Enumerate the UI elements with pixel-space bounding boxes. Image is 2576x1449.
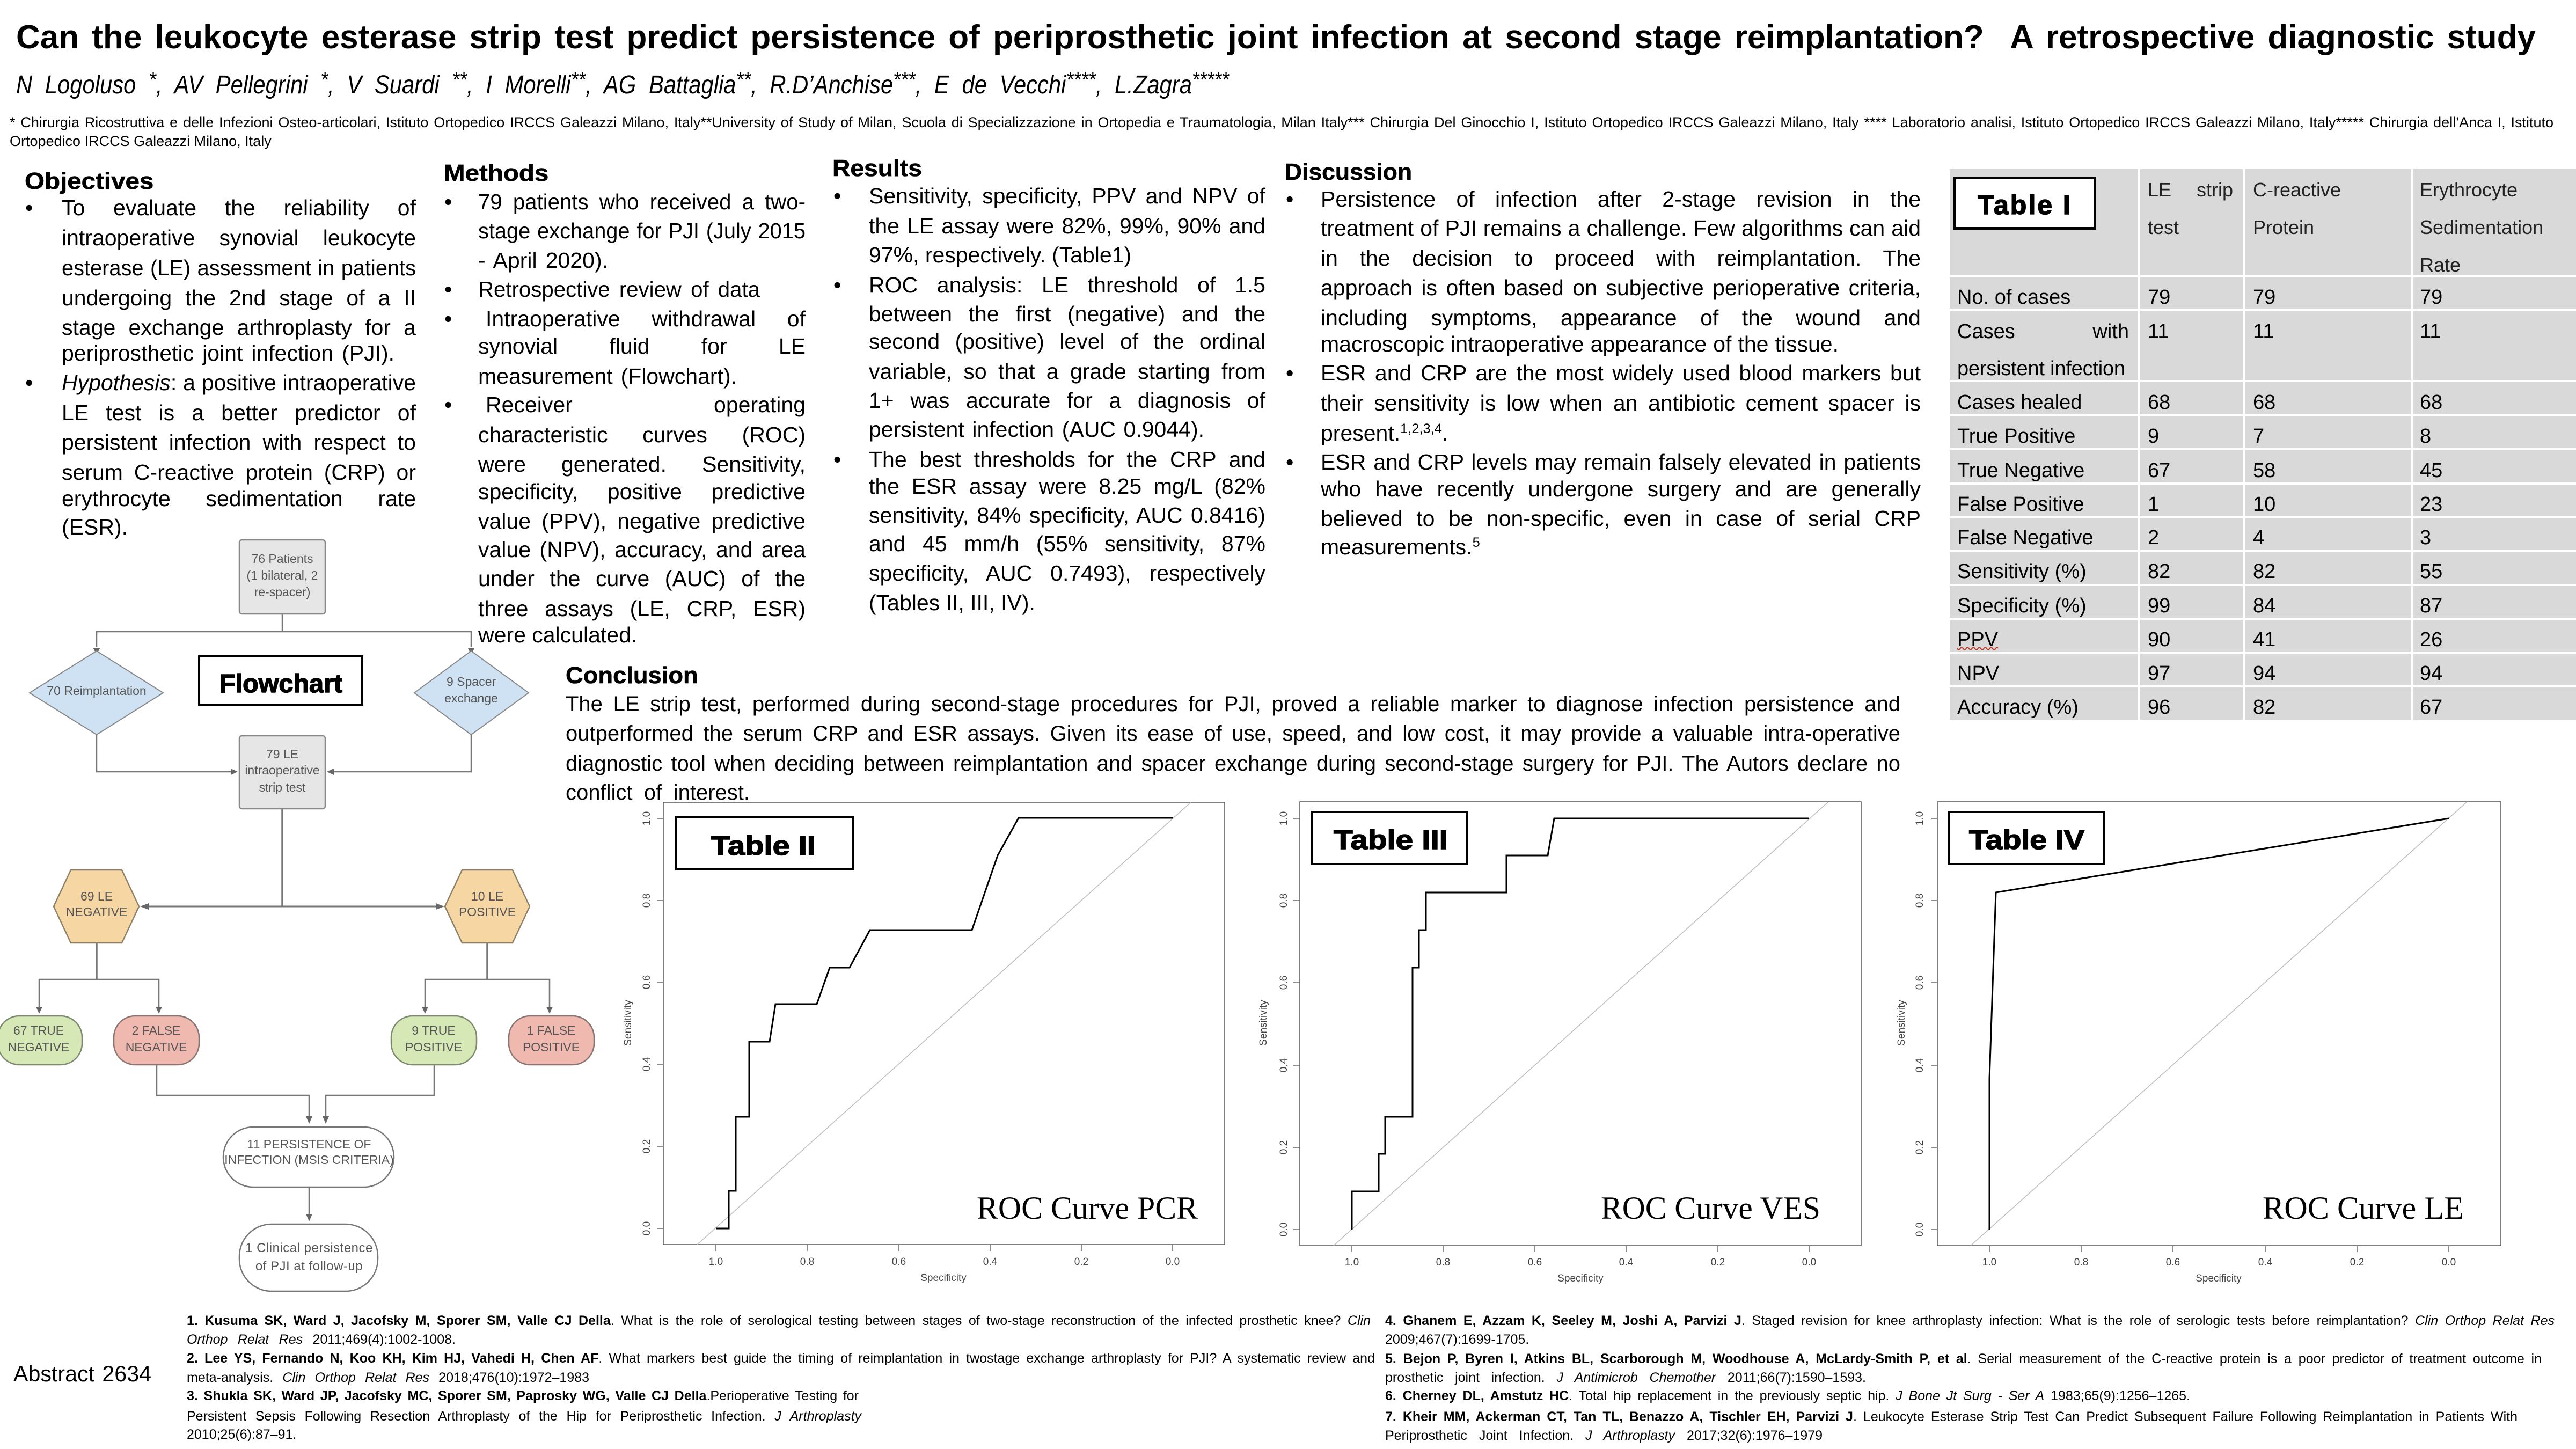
row: sensitivity: 55 bbox=[2420, 560, 2442, 583]
y axis labels: Sensitivity bbox=[623, 1000, 634, 1046]
conclusion text: outperformed the serum CRP and ESR assays. Given its ease of use, speed, and low cost, it may provide a valuable intra-operative bbox=[566, 722, 1900, 745]
row: cases healed: 68 bbox=[2253, 391, 2275, 414]
y axis labels: 0.4 bbox=[641, 1057, 653, 1071]
conclusion text: The LE strip test, performed during second-stage procedures for PJI, proved a reliable marker to diagnose infection persistence and bbox=[566, 692, 1900, 716]
y axis labels: 0.2 bbox=[1278, 1140, 1290, 1154]
y axis labels: 1.0 bbox=[1914, 811, 1926, 825]
results text: (Tables II, III, IV). bbox=[869, 590, 1035, 615]
row: cases with persistent infection: persistent infection bbox=[1957, 357, 2125, 380]
objectives text: LE test is a better predictor of bbox=[62, 400, 416, 425]
discussion text: treatment of PJI remains a challenge. Few algorithms can aid bbox=[1321, 216, 1921, 240]
row: cases with persistent infection: Cases with bbox=[1957, 320, 2129, 343]
x axis labels: 1.0 bbox=[1345, 1257, 1359, 1268]
methods text: Receiver operating bbox=[486, 392, 806, 417]
references right column: 2009;467(7):1699-1705. bbox=[1385, 1332, 1529, 1347]
node: 76 patients: re-spacer) bbox=[254, 585, 310, 599]
x axis labels: Specificity bbox=[1557, 1273, 1604, 1284]
panel: discussion bbox=[1285, 159, 1921, 559]
x axis labels: 0.2 bbox=[1711, 1257, 1725, 1268]
discussion text: believed to be non-specific, even in case of serial CRP bbox=[1321, 506, 1921, 531]
methods text: • bbox=[444, 392, 452, 417]
results text: • bbox=[833, 273, 841, 297]
row: PPV: PPV bbox=[1957, 628, 1998, 651]
row: accuracy: 67 bbox=[2420, 696, 2442, 719]
discussion text: • bbox=[1286, 361, 1293, 385]
node: 1 clinical persistence bbox=[239, 1224, 378, 1291]
node: 70 reimplantation: 70 Reimplantation bbox=[47, 684, 147, 698]
references left column: 3. Shukla SK, Ward JP, Jacofsky MC, Sporer SM, Paprosky WG, Valle CJ Della.Perioperative Testing for bbox=[187, 1388, 859, 1403]
results text bbox=[833, 184, 1265, 615]
discussion text: their sensitivity is low when an antibiotic cement spacer is bbox=[1321, 391, 1921, 415]
objectives text: undergoing the 2nd stage of a II bbox=[62, 286, 416, 310]
curve label: ROC Curve LE bbox=[2263, 1190, 2464, 1226]
row: specificity: 87 bbox=[2420, 595, 2442, 617]
row: true positive: 8 bbox=[2420, 425, 2431, 448]
x axis labels: 0.0 bbox=[1166, 1256, 1180, 1268]
x axis labels: 0.0 bbox=[2442, 1257, 2456, 1268]
references right column bbox=[1385, 1313, 2555, 1443]
table III label box bbox=[1312, 812, 1467, 864]
node: 2 false negative: 2 FALSE bbox=[132, 1023, 180, 1037]
node: 11 persistence of infection bbox=[223, 1127, 394, 1187]
objectives text: To evaluate the reliability of bbox=[62, 195, 416, 220]
node: 11 persistence of infection: INFECTION (MSIS CRITERIA) bbox=[224, 1153, 394, 1167]
node: 70 reimplantation bbox=[30, 651, 163, 735]
row: accuracy: Accuracy (%) bbox=[1957, 696, 2079, 719]
table I label box: Table I bbox=[1978, 190, 2072, 220]
objectives text: Hypothesis: a positive intraoperative bbox=[62, 370, 416, 395]
references left column: 2. Lee YS, Fernando N, Koo KH, Kim HJ, Vahedi H, Chen AF. What markers best guide the timing of reimplantation in twostage exchange arthroplasty for PJI? A systematic review and bbox=[187, 1351, 1375, 1366]
node: 10 LE positive bbox=[445, 870, 530, 943]
node: 79 LE strip test: intraoperative bbox=[245, 763, 320, 777]
row: cases with persistent infection: 11 bbox=[2253, 320, 2274, 343]
row: PPV: 26 bbox=[2420, 628, 2442, 651]
methods text: Intraoperative withdrawal of bbox=[486, 306, 806, 331]
chart: ROC curve PCR bbox=[623, 802, 1225, 1284]
results text: ROC analysis: LE threshold of 1.5 bbox=[869, 273, 1265, 297]
y axis labels: 0.4 bbox=[1914, 1058, 1926, 1072]
discussion text: measurements.5 bbox=[1321, 535, 1480, 559]
y axis labels: Sensitivity bbox=[1258, 1000, 1269, 1046]
x axis labels bbox=[709, 1256, 1180, 1284]
row: sensitivity bbox=[1950, 552, 2576, 584]
y axis labels bbox=[623, 811, 653, 1235]
y axis labels: 0.0 bbox=[1914, 1223, 1926, 1236]
row: true positive: 9 bbox=[2148, 425, 2159, 448]
results text: • bbox=[833, 447, 841, 472]
methods text: characteristic curves (ROC) bbox=[478, 422, 806, 447]
node: 9 spacer exchange: 9 Spacer bbox=[447, 675, 496, 689]
row: no. of cases: 79 bbox=[2420, 286, 2442, 309]
heading: results: Results bbox=[832, 155, 922, 181]
ROC curve line bbox=[1352, 818, 1809, 1230]
results text: between the first (negative) and the bbox=[869, 302, 1265, 326]
row: true negative: 58 bbox=[2253, 459, 2275, 482]
node: 1 false positive: POSITIVE bbox=[523, 1040, 580, 1054]
x axis labels: 0.8 bbox=[2074, 1257, 2088, 1268]
node: 1 clinical persistence: 1 Clinical persistence bbox=[245, 1241, 373, 1255]
references left column: meta-analysis. Clin Orthop Relat Res 2018;476(10):1972–1983 bbox=[187, 1370, 589, 1385]
results text: variable, so that a grade starting from bbox=[869, 359, 1265, 384]
node: 67 true negative: 67 TRUE bbox=[13, 1023, 64, 1037]
row: PPV: 41 bbox=[2253, 628, 2275, 651]
methods text: specificity, positive predictive bbox=[478, 479, 806, 504]
y axis labels: 0.8 bbox=[1278, 894, 1290, 908]
row: true positive: True Positive bbox=[1957, 425, 2075, 448]
discussion text: who have recently undergone surgery and are generally bbox=[1321, 477, 1921, 501]
node: 67 true negative bbox=[0, 1016, 82, 1065]
row: false positive: 23 bbox=[2420, 493, 2442, 516]
discussion text: including symptoms, appearance of the wound and bbox=[1321, 305, 1921, 330]
references right column: 6. Cherney DL, Amstutz HC. Total hip replacement in the previously septic hip. J Bone Jt Surg - Ser A 1983;65(9):1256–1265. bbox=[1385, 1388, 2190, 1403]
affiliations bbox=[10, 114, 2553, 149]
row: true negative: True Negative bbox=[1957, 459, 2084, 482]
row: false negative: 4 bbox=[2253, 526, 2264, 549]
y axis labels: 0.6 bbox=[1914, 976, 1926, 990]
x axis labels: 0.2 bbox=[1074, 1256, 1088, 1268]
row: false positive: False Positive bbox=[1957, 493, 2084, 516]
affiliations: * Chirurgia Ricostruttiva e delle Infezioni Osteo-articolari, Istituto Ortopedico IRCCS Galeazzi Milano, Italy**University of Study of Milan, Scuola di Specializzazione in Ortopedia e Traumatologia, Milan Italy*** Chirurgia Del Ginocchio I, Istituto Ortopedico IRCCS Galeazzi Milano, Italy **** Laboratorio analisi, Istituto Ortopedico IRCCS Galeazzi Milano, Italy***** Chirurgia dell’Anca I, Istituto bbox=[10, 114, 2553, 130]
row: cases with persistent infection: 11 bbox=[2420, 320, 2441, 343]
row: cases healed bbox=[1950, 382, 2576, 414]
node: 1 clinical persistence: of PJI at follow-up bbox=[255, 1259, 363, 1274]
x axis labels: 1.0 bbox=[1982, 1257, 1996, 1268]
ROC curve line bbox=[716, 818, 1173, 1228]
node: 11 persistence of infection: 11 PERSISTENCE OF bbox=[247, 1137, 371, 1151]
row: cases healed: Cases healed bbox=[1957, 391, 2082, 414]
node: 10 LE positive: 10 LE bbox=[471, 889, 503, 903]
panel: objectives bbox=[25, 168, 416, 539]
row: specificity: 84 bbox=[2253, 595, 2275, 617]
references left column: Orthop Relat Res 2011;469(4):1002-1008. bbox=[187, 1332, 456, 1347]
objectives text: serum C-reactive protein (CRP) or bbox=[62, 460, 416, 485]
node: 76 patients: 76 Patients bbox=[251, 552, 313, 566]
row: true positive: 7 bbox=[2253, 425, 2264, 448]
node: 1 false positive: 1 FALSE bbox=[527, 1023, 575, 1037]
objectives text: stage exchange arthroplasty for a bbox=[62, 315, 416, 340]
table header row: Rate bbox=[2420, 254, 2461, 276]
row: no. of cases bbox=[1950, 277, 2576, 309]
methods text: 79 patients who received a two- bbox=[478, 189, 806, 214]
conclusion text: conflict of interest. bbox=[566, 781, 750, 804]
objectives text: persistent infection with respect to bbox=[62, 430, 416, 455]
table header row bbox=[1950, 169, 2576, 275]
row: NPV: 97 bbox=[2148, 662, 2170, 685]
x axis labels bbox=[1345, 1257, 1816, 1284]
curve label: ROC Curve VES bbox=[1601, 1190, 1820, 1226]
methods text: measurement (Flowchart). bbox=[478, 364, 737, 389]
row: cases healed: 68 bbox=[2420, 391, 2442, 414]
node: 9 spacer exchange bbox=[414, 651, 529, 735]
panel: methods bbox=[444, 160, 806, 647]
row: NPV: 94 bbox=[2420, 662, 2442, 685]
node: 9 true positive: POSITIVE bbox=[405, 1040, 462, 1054]
x axis labels: 0.4 bbox=[2258, 1257, 2273, 1268]
row: accuracy: 96 bbox=[2148, 696, 2170, 719]
methods text: three assays (LE, CRP, ESR) bbox=[478, 596, 806, 621]
table header row: Protein bbox=[2253, 216, 2314, 238]
objectives text: • bbox=[25, 195, 33, 220]
node: 9 true positive bbox=[391, 1016, 477, 1065]
x axis labels: 0.6 bbox=[1528, 1257, 1542, 1268]
methods text: value (PPV), negative predictive bbox=[478, 509, 806, 533]
panel: conclusion bbox=[566, 662, 1900, 804]
results text: 1+ was accurate for a diagnosis of bbox=[869, 388, 1265, 413]
table IV label box: Table IV bbox=[1969, 825, 2085, 855]
node: 2 false negative bbox=[114, 1016, 199, 1065]
references left column: 1. Kusuma SK, Ward J, Jacofsky M, Sporer SM, Valle CJ Della. What is the role of serological testing between stages of two-stage reconstruction of the infected prosthetic knee? Clin bbox=[187, 1313, 1371, 1328]
methods text: value (NPV), accuracy, and area bbox=[478, 537, 806, 562]
table header row: Erythrocyte bbox=[2420, 179, 2518, 201]
methods text: were generated. Sensitivity, bbox=[478, 452, 806, 477]
references right column: prosthetic joint infection. J Antimicrob Chemother 2011;66(7):1590–1593. bbox=[1385, 1370, 1866, 1385]
node: 67 true negative: NEGATIVE bbox=[8, 1040, 69, 1054]
discussion text bbox=[1286, 187, 1921, 559]
discussion text: ESR and CRP levels may remain falsely elevated in patients bbox=[1321, 450, 1921, 474]
objectives text: periprosthetic joint infection (PJI). bbox=[62, 341, 394, 365]
y axis labels: 0.8 bbox=[641, 894, 653, 908]
results text: the ESR assay were 8.25 mg/L (82% bbox=[869, 474, 1265, 499]
y axis labels: 0.8 bbox=[1914, 894, 1926, 908]
flowchart label box: Flowchart bbox=[219, 670, 342, 698]
node: 1 false positive bbox=[509, 1016, 594, 1065]
x axis labels: Specificity bbox=[920, 1272, 967, 1284]
y axis labels: 1.0 bbox=[641, 811, 653, 825]
row: no. of cases: No. of cases bbox=[1957, 286, 2070, 309]
row: false negative bbox=[1950, 518, 2576, 550]
results text: sensitivity, 84% specificity, AUC 0.8416) bbox=[869, 503, 1265, 528]
chart: ROC curve VES bbox=[1258, 802, 1861, 1284]
y axis labels: Sensitivity bbox=[1896, 1000, 1907, 1046]
row: no. of cases: 79 bbox=[2253, 286, 2275, 309]
node: 76 patients: (1 bilateral, 2 bbox=[247, 568, 318, 582]
row: true positive bbox=[1950, 416, 2576, 448]
table IV label box bbox=[1949, 812, 2104, 864]
row: specificity: 99 bbox=[2148, 595, 2170, 617]
heading: methods: Methods bbox=[444, 160, 548, 186]
node: 69 LE negative bbox=[54, 870, 139, 943]
node: 79 LE strip test: strip test bbox=[259, 780, 306, 794]
row: false negative: 3 bbox=[2420, 526, 2431, 549]
methods text: stage exchange for PJI (July 2015 bbox=[478, 218, 806, 243]
row: false positive bbox=[1950, 485, 2576, 516]
row: false negative: False Negative bbox=[1957, 526, 2093, 549]
node: 9 true positive: 9 TRUE bbox=[412, 1023, 456, 1037]
row: PPV bbox=[1950, 620, 2576, 652]
heading: discussion: Discussion bbox=[1285, 159, 1412, 185]
node: 69 LE negative: NEGATIVE bbox=[66, 905, 127, 919]
node: 76 patients bbox=[239, 540, 325, 614]
y axis labels: 0.6 bbox=[1278, 976, 1290, 990]
references right column: Periprosthetic Joint Infection. J Arthroplasty 2017;32(6):1976–1979 bbox=[1385, 1428, 1823, 1443]
row: true negative: 45 bbox=[2420, 459, 2442, 482]
y axis labels: 0.0 bbox=[1278, 1223, 1290, 1236]
references left column: Persistent Sepsis Following Resection Arthroplasty of the Hip for Periprosthetic Infection. J Arthroplasty bbox=[187, 1409, 861, 1424]
y axis labels: 0.0 bbox=[641, 1221, 653, 1235]
discussion text: approach is often based on subjective perioperative criteria, bbox=[1321, 275, 1921, 300]
references left column: 2010;25(6):87–91. bbox=[187, 1427, 296, 1442]
row: PPV: 90 bbox=[2148, 628, 2170, 651]
methods text: synovial fluid for LE bbox=[478, 334, 806, 358]
chart: ROC curve LE bbox=[1896, 802, 2501, 1284]
title: Can the leukocyte esterase strip test predict persistence of periprosthetic joint infection at second stage reimplantation? A retrospective diagnostic study bbox=[16, 19, 2536, 56]
row: no. of cases: 79 bbox=[2148, 286, 2170, 309]
discussion text: ESR and CRP are the most widely used blood markers but bbox=[1321, 361, 1921, 385]
discussion text: macroscopic intraoperative appearance of the tissue. bbox=[1321, 332, 1839, 356]
row: sensitivity: 82 bbox=[2148, 560, 2170, 583]
y axis labels bbox=[1896, 811, 1926, 1236]
node: 69 LE negative: 69 LE bbox=[80, 889, 113, 903]
row: false negative: 2 bbox=[2148, 526, 2159, 549]
node: 79 LE strip test bbox=[239, 736, 325, 809]
panel: results bbox=[832, 155, 1265, 615]
x axis labels: 0.8 bbox=[1436, 1257, 1450, 1268]
results text: second (positive) level of the ordinal bbox=[869, 329, 1265, 354]
discussion text: in the decision to proceed with reimplantation. The bbox=[1321, 246, 1921, 270]
node: 2 false negative: NEGATIVE bbox=[126, 1040, 187, 1054]
methods text bbox=[444, 189, 806, 647]
x axis labels: 0.6 bbox=[892, 1256, 906, 1268]
row: false positive: 10 bbox=[2253, 493, 2275, 516]
discussion text: Persistence of infection after 2-stage revision in the bbox=[1321, 187, 1921, 211]
y axis labels: 1.0 bbox=[1278, 811, 1290, 825]
row: accuracy: 82 bbox=[2253, 696, 2275, 719]
x axis labels: 0.2 bbox=[2350, 1257, 2364, 1268]
conclusion text: diagnostic tool when deciding between reimplantation and spacer exchange during second-stage surgery for PJI. The Autors declare no bbox=[566, 752, 1900, 775]
references right column: 7. Kheir MM, Ackerman CT, Tan TL, Benazzo A, Tischler EH, Parvizi J. Leukocyte Esterase Strip Test Can Predict Subsequent Failure Following Reimplantation in Patients With bbox=[1385, 1409, 2518, 1424]
ROC curve line bbox=[1989, 818, 2449, 1230]
methods text: - April 2020). bbox=[478, 248, 608, 273]
objectives text: (ESR). bbox=[62, 515, 128, 539]
row: accuracy bbox=[1950, 687, 2576, 720]
discussion text: • bbox=[1286, 187, 1293, 211]
row: cases healed: 68 bbox=[2148, 391, 2170, 414]
node: 79 LE strip test: 79 LE bbox=[266, 747, 298, 761]
row: true negative bbox=[1950, 450, 2576, 482]
y axis labels: 0.4 bbox=[1278, 1058, 1290, 1072]
results text: 97%, respectively. (Table1) bbox=[869, 243, 1131, 267]
row: NPV: 94 bbox=[2253, 662, 2275, 685]
flowchart label box bbox=[199, 656, 362, 705]
row: sensitivity: 82 bbox=[2253, 560, 2275, 583]
discussion text: present.1,2,3,4. bbox=[1321, 421, 1448, 445]
row: NPV bbox=[1950, 654, 2576, 685]
row: true negative: 67 bbox=[2148, 459, 2170, 482]
row: false positive: 1 bbox=[2148, 493, 2159, 516]
heading: conclusion: Conclusion bbox=[566, 662, 698, 689]
discussion text: • bbox=[1286, 450, 1293, 474]
y axis labels: 0.2 bbox=[641, 1139, 653, 1153]
flowchart bbox=[0, 540, 594, 1291]
methods text: were calculated. bbox=[478, 623, 637, 647]
row: specificity bbox=[1950, 586, 2576, 618]
node: 10 LE positive: POSITIVE bbox=[459, 905, 516, 919]
x axis labels: 0.4 bbox=[1619, 1257, 1634, 1268]
y axis labels bbox=[1258, 811, 1290, 1236]
authors: N Logoluso *, AV Pellegrini *, V Suardi **, I Morelli**, AG Battaglia**, R.D’Anchise***, E de Vecchi****, L.Zagra***** bbox=[16, 67, 1229, 99]
table I label box bbox=[1953, 177, 2096, 230]
row: cases with persistent infection bbox=[1950, 311, 2576, 380]
references right column: 4. Ghanem E, Azzam K, Seeley M, Joshi A, Parvizi J. Staged revision for knee arthroplasty infection: What is the role of serologic tests before reimplantation? Clin Orthop Relat Res bbox=[1385, 1313, 2555, 1328]
objectives text: • bbox=[25, 370, 33, 395]
abstract number: Abstract 2634 bbox=[13, 1361, 151, 1386]
results text: • bbox=[833, 184, 841, 208]
affiliations: Ortopedico IRCCS Galeazzi Milano, Italy bbox=[10, 133, 272, 149]
x axis labels: 0.0 bbox=[1802, 1257, 1816, 1268]
objectives text bbox=[25, 195, 416, 539]
row: cases with persistent infection: 11 bbox=[2148, 320, 2169, 343]
row: specificity: Specificity (%) bbox=[1957, 595, 2087, 617]
row: NPV: NPV bbox=[1957, 662, 1999, 685]
references left column bbox=[187, 1313, 1375, 1442]
table header row: LE strip bbox=[2148, 179, 2233, 201]
objectives text: intraoperative synovial leukocyte bbox=[62, 225, 416, 250]
table header row: test bbox=[2148, 216, 2179, 238]
table header row: Sedimentation bbox=[2420, 216, 2543, 238]
y axis labels: 0.6 bbox=[641, 975, 653, 989]
references right column: 5. Bejon P, Byren I, Atkins BL, Scarborough M, Woodhouse A, McLardy-Smith P, et al. Serial measurement of the C-reactive protein is a poor predictor of treatment outcome in bbox=[1385, 1351, 2542, 1366]
x axis labels: 0.6 bbox=[2166, 1257, 2180, 1268]
x axis labels: Specificity bbox=[2196, 1273, 2242, 1284]
curve label: ROC Curve PCR bbox=[977, 1190, 1198, 1226]
results text: The best thresholds for the CRP and bbox=[869, 447, 1265, 472]
results text: persistent infection (AUC 0.9044). bbox=[869, 417, 1204, 442]
node: 9 spacer exchange: exchange bbox=[444, 691, 498, 705]
methods text: • bbox=[444, 277, 452, 302]
methods text: • bbox=[444, 189, 452, 214]
methods text: • bbox=[444, 306, 452, 331]
objectives text: erythrocyte sedimentation rate bbox=[62, 486, 416, 511]
table II label box bbox=[676, 817, 853, 869]
methods text: under the curve (AUC) of the bbox=[478, 566, 806, 591]
results text: and 45 mm/h (55% sensitivity, 87% bbox=[869, 531, 1265, 556]
row: sensitivity: Sensitivity (%) bbox=[1957, 560, 2087, 583]
results text: specificity, AUC 0.7493), respectively bbox=[869, 561, 1265, 586]
x axis labels bbox=[1982, 1257, 2456, 1284]
heading: objectives: Objectives bbox=[25, 168, 153, 194]
results text: the LE assay were 82%, 99%, 90% and bbox=[869, 214, 1265, 238]
methods text: Retrospective review of data bbox=[478, 277, 760, 302]
x axis labels: 0.8 bbox=[800, 1256, 814, 1268]
objectives text: esterase (LE) assessment in patients bbox=[62, 255, 416, 280]
y axis labels: 0.2 bbox=[1914, 1140, 1926, 1154]
table II label box: Table II bbox=[711, 831, 816, 861]
results text: Sensitivity, specificity, PPV and NPV of bbox=[869, 184, 1265, 208]
table III label box: Table III bbox=[1334, 825, 1448, 855]
x axis labels: 0.4 bbox=[983, 1256, 998, 1268]
table header row: C-reactive bbox=[2253, 179, 2341, 201]
conclusion text bbox=[566, 692, 1900, 804]
x axis labels: 1.0 bbox=[709, 1256, 723, 1268]
table I bbox=[1950, 169, 2576, 720]
